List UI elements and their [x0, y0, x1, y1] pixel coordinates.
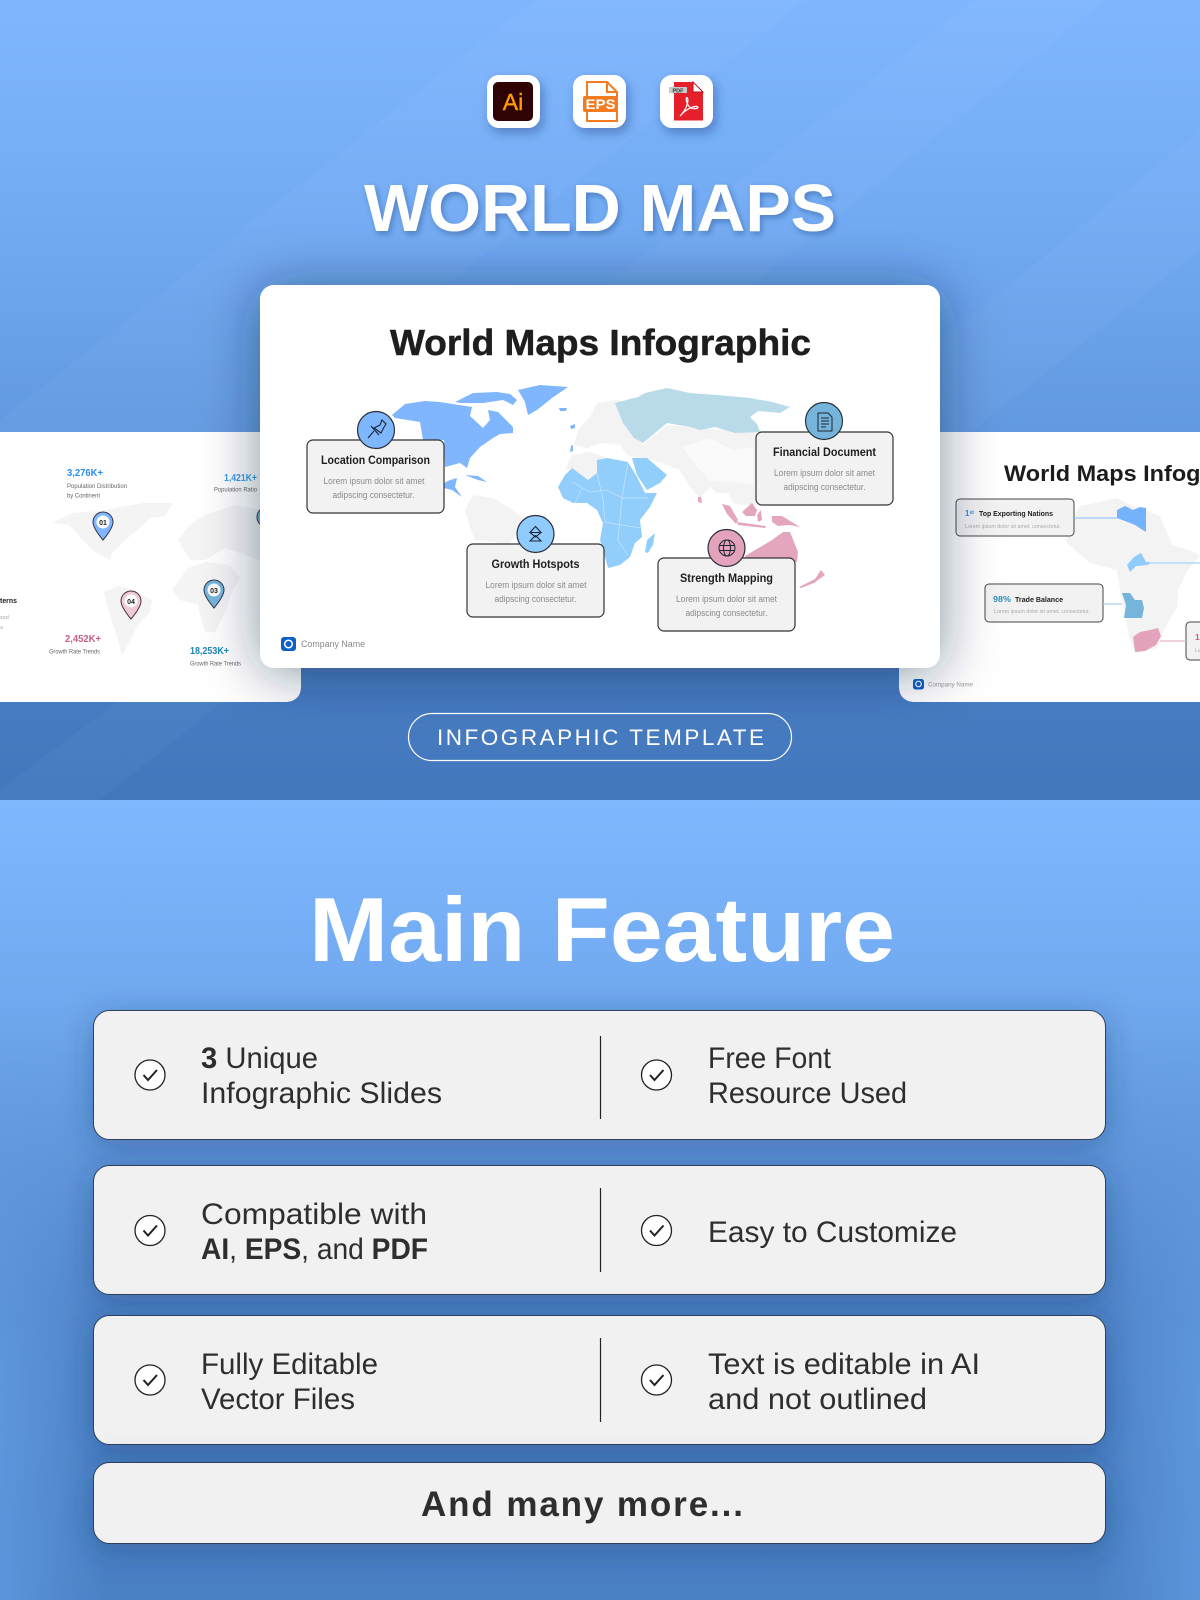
feature row 2 — [94, 1166, 1106, 1294]
callout: Financial Document: Financial Document — [773, 445, 876, 459]
callout: top exporting nations: 1 — [965, 509, 969, 518]
map pin 04: 04 — [127, 599, 135, 606]
Russia — [615, 388, 790, 443]
text: Text is editable in AI and not outlined: and not outlined — [708, 1383, 927, 1416]
feature row 1 — [94, 1010, 1106, 1140]
callout: cropped pink: 1 — [1195, 632, 1200, 642]
text: Free Font Resource Used: Free Font — [708, 1042, 832, 1075]
text: Easy to Customize: Easy to Customize — [708, 1216, 957, 1249]
Greenland — [518, 385, 568, 415]
text: Fully Editable Vector Files: Vector Files — [201, 1383, 355, 1416]
world map silhouette — [52, 503, 260, 656]
cropped label: patterns — [0, 598, 17, 629]
callout: Location Comparison — [307, 412, 444, 513]
stat: 18,253K+: Growth Rate Trends — [190, 662, 241, 668]
Africa silhouette — [1066, 498, 1200, 653]
check icon — [642, 1216, 672, 1246]
text: Text is editable in AI and not outlined — [708, 1348, 980, 1416]
feature section background — [0, 800, 1200, 1600]
New Zealand — [799, 570, 825, 588]
icon: globe — [708, 530, 745, 566]
text: Compatible with AI, EPS, and PDF: AI, EPS, and PDF — [201, 1233, 428, 1266]
top banner background — [0, 0, 1200, 800]
icon: EPS file: EPS — [586, 96, 616, 112]
map pin 03 — [204, 580, 224, 608]
text: 3 Unique Infographic Slides: Infographic Slides — [201, 1077, 442, 1110]
Arabia — [632, 458, 667, 490]
cropped label: patterns: a — [0, 625, 4, 631]
check icon — [135, 1365, 165, 1395]
panel: main slide preview — [260, 285, 940, 668]
Africa borders — [572, 462, 648, 556]
stat: 3,276K+ — [67, 467, 127, 500]
icon: PDF file: PDF — [672, 88, 684, 94]
format icons row — [487, 75, 713, 128]
stat: 18,253K+ — [190, 647, 241, 666]
callout: trade balance: Lorem ipsum dolor sit amet, consectetur. — [994, 609, 1090, 615]
callout: Financial Document: Lorem ipsum dolor sit amet — [774, 468, 875, 478]
Madagascar — [645, 533, 655, 553]
callout: Strength Mapping: Strength Mapping — [680, 571, 773, 585]
heading: Main Feature: Main Feature — [309, 880, 895, 981]
callout: Location Comparison: Location Comparison — [321, 453, 430, 467]
Southeast Asia islands — [698, 497, 800, 528]
cropped label: patterns: sed — [0, 615, 9, 621]
callout: Strength Mapping: adipscing consectetur. — [686, 608, 768, 618]
Iceland and UK accents — [559, 408, 575, 452]
check icon — [135, 1216, 165, 1246]
Australia — [745, 532, 798, 562]
panel: right slide preview — [899, 432, 1200, 702]
feature row 3 — [94, 1316, 1106, 1444]
North Africa — [565, 452, 607, 480]
callout: Growth Hotspots: Growth Hotspots — [492, 557, 580, 571]
callout: trade balance — [985, 584, 1103, 622]
icon: Adobe Illustrator — [487, 75, 540, 128]
callout: Financial Document — [756, 402, 893, 505]
panel: left slide preview — [0, 432, 301, 702]
icon: pushpin — [358, 412, 394, 448]
check icon — [135, 1060, 165, 1090]
stat: 1,421K+: Population Ratio — [214, 488, 258, 494]
world map — [392, 385, 825, 588]
stat: 2,452K+: Growth Rate Trends — [49, 650, 100, 656]
callout: Growth Hotspots: adipscing consectetur. — [494, 594, 576, 604]
stat: 3,276K+: Population Distribution — [67, 484, 127, 490]
cropped label: patterns: terns — [0, 596, 17, 605]
map pin 04 — [121, 591, 141, 619]
callout: Financial Document: adipscing consectetur. — [784, 482, 866, 492]
feature row 4: And many more: And many more... — [421, 1485, 743, 1524]
text: Compatible with AI, EPS, and PDF: Compatible with — [201, 1198, 427, 1231]
callout: trade balance: 98% — [993, 594, 1011, 604]
Eurasia — [574, 400, 757, 505]
callout: top exporting nations: st — [969, 510, 974, 516]
text: Compatible with AI, EPS, and PDF — [201, 1198, 428, 1266]
text: Free Font Resource Used: Resource Used — [708, 1077, 907, 1110]
company logo and name: Company Name — [301, 639, 365, 649]
icon: Adobe Illustrator: Ai — [503, 89, 523, 115]
check icon — [642, 1060, 672, 1090]
callout: top exporting nations — [956, 499, 1074, 536]
text: Fully Editable Vector Files — [201, 1348, 378, 1416]
text: Free Font Resource Used — [708, 1042, 907, 1110]
map pin 01: 01 — [99, 520, 107, 527]
callout: Strength Mapping: Lorem ipsum dolor sit amet — [676, 594, 777, 604]
text: 3 Unique Infographic Slides — [201, 1042, 442, 1110]
icon: double triangles — [517, 516, 554, 552]
text: Text is editable in AI and not outlined: Text is editable in AI — [708, 1348, 980, 1381]
callout: Location Comparison: adipscing consectetur. — [332, 490, 414, 500]
company logo and name — [281, 637, 365, 651]
map pin 01 — [93, 512, 113, 540]
stat: 3,276K+: 3,276K+ — [67, 467, 103, 479]
text: Fully Editable Vector Files: Fully Editable — [201, 1348, 378, 1381]
North America — [392, 401, 513, 468]
callout: Growth Hotspots: Lorem ipsum dolor sit amet — [486, 580, 587, 590]
South America — [465, 495, 525, 544]
callout: top exporting nations: Lorem ipsum dolor sit amet, consectetur. — [965, 524, 1061, 530]
title: WORLD MAPS — [364, 171, 836, 246]
icon: PDF file — [660, 75, 713, 128]
callout: Strength Mapping — [658, 530, 795, 631]
stat: 18,253K+: 18,253K+ — [190, 645, 229, 657]
template badge: INFOGRAPHIC TEMPLATE — [437, 725, 764, 750]
callout: trade balance: Trade Balance — [1015, 595, 1063, 604]
stat: 1,421K+ — [214, 474, 257, 493]
map pin 03: 03 — [210, 588, 218, 595]
text: 3 Unique Infographic Slides: 3 Unique — [201, 1042, 318, 1075]
stat: 2,452K+: 2,452K+ — [65, 633, 101, 645]
cropped icon circle — [256, 509, 260, 525]
stat: 1,421K+: 1,421K+ — [224, 472, 257, 484]
callout: cropped pink — [1186, 622, 1200, 660]
stat: 2,452K+ — [49, 635, 101, 654]
icon: document — [806, 402, 842, 440]
callout: top exporting nations: Top Exporting Nations — [979, 509, 1053, 518]
callout: Location Comparison: Lorem ipsum dolor sit amet — [324, 476, 425, 486]
stat: 3,276K+: by Continent — [67, 494, 100, 500]
Africa — [558, 458, 657, 568]
callout: Growth Hotspots — [467, 516, 604, 617]
check icon — [642, 1365, 672, 1395]
company logo and name — [913, 679, 973, 690]
company logo and name: Company Name — [928, 682, 973, 688]
feature row 4: And many more — [94, 1462, 1106, 1544]
slide title: World Maps Infographic — [390, 322, 811, 363]
highlighted countries and leader lines — [1074, 506, 1200, 652]
icon: EPS file — [573, 75, 626, 128]
template badge — [408, 714, 792, 760]
